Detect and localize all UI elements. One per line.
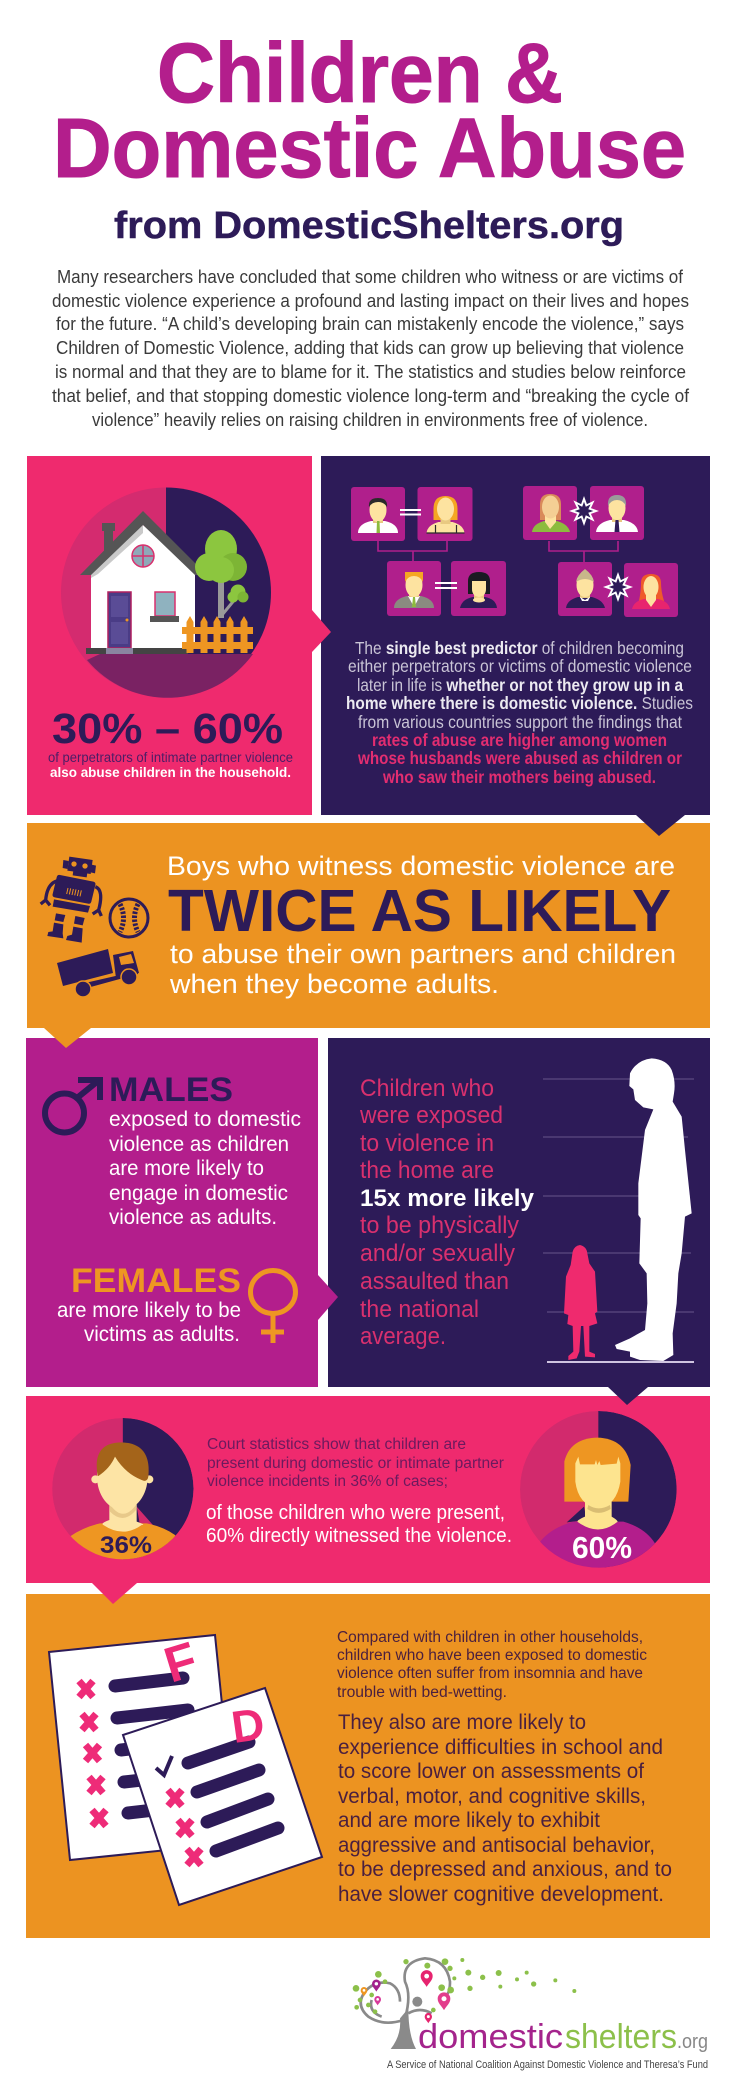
connector lines xyxy=(378,541,618,562)
title: Domestic Abuse xyxy=(53,101,686,195)
text: children exposed: 15x more likely xyxy=(360,1185,535,1212)
stat: 36%: 36% xyxy=(100,1532,152,1559)
icon: equals sign bottom xyxy=(435,583,457,588)
icon: girl 60 percent pie xyxy=(520,1411,677,1572)
icon: baseball xyxy=(110,899,148,937)
text: school difficulties: to score lower on assessments of xyxy=(338,1760,644,1783)
intro paragraph: Children of Domestic Violence, adding that kids can grow up believing that violence xyxy=(56,338,684,358)
text: children exposed: and/or sexually xyxy=(360,1240,515,1267)
icon: test paper graded F: F xyxy=(158,1631,203,1694)
icon: female symbol xyxy=(250,1270,296,1343)
icon: man with navy tie xyxy=(590,486,644,540)
stat caption: of perpetrators of intimate partner violence xyxy=(48,750,293,765)
icon: man in navy suit xyxy=(558,562,612,616)
text: insomnia and bed-wetting: children who have been exposed to domestic xyxy=(337,1647,647,1664)
icon: woman in green top xyxy=(523,486,577,540)
lead text: Boys who witness domestic violence are xyxy=(167,851,675,881)
icon: test paper graded D: D xyxy=(228,1698,268,1753)
icon: toy robot xyxy=(41,857,101,943)
text: children exposed: assaulted than xyxy=(360,1268,509,1295)
text: males: engage in domestic xyxy=(109,1182,288,1205)
text: children exposed xyxy=(359,1075,535,1350)
heading: females: FEMALES xyxy=(71,1262,241,1300)
text: children exposed: the home are xyxy=(360,1157,494,1184)
icon: test paper graded D xyxy=(123,1688,322,1905)
text: females: victims as adults. xyxy=(84,1323,240,1346)
follow-up text xyxy=(169,939,676,999)
text: insomnia and bed-wetting xyxy=(337,1629,647,1701)
text: directly witnessed: of those children who were present, xyxy=(206,1501,505,1524)
subtitle: from DomesticShelters.org xyxy=(114,205,624,247)
icon: tree with map pins xyxy=(353,1958,576,2049)
icon: woman with blonde hair xyxy=(418,487,472,541)
text: children exposed: average. xyxy=(360,1323,446,1350)
text: court statistics: Court statistics show that children are xyxy=(207,1436,466,1453)
stat: 60%: 60% xyxy=(572,1530,632,1565)
icon: house in circle xyxy=(61,488,271,698)
text: school difficulties: aggressive and antisocial behavior, xyxy=(338,1834,655,1857)
silhouette: child xyxy=(564,1245,597,1360)
text: children exposed: were exposed xyxy=(359,1102,503,1129)
arrow: pink to navy panel xyxy=(312,610,331,652)
text: males: are more likely to xyxy=(109,1157,264,1180)
follow-up text: to abuse their own partners and children xyxy=(170,939,676,969)
silhouette: adult xyxy=(615,1058,692,1361)
intro paragraph: is normal and that they are to blame for it. The statistics and studies below reinforce xyxy=(55,362,686,382)
predictor text: who saw their mothers being abused. xyxy=(382,767,656,787)
panel: 30 to 60 percent stat xyxy=(27,456,331,815)
title: Children & xyxy=(157,26,563,120)
arrow: navy to orange panel xyxy=(636,815,685,836)
icon: male symbol xyxy=(45,1080,100,1132)
text: females: are more likely to be xyxy=(57,1299,241,1322)
text: insomnia and bed-wetting: violence often suffer from insomnia and have xyxy=(337,1665,643,1682)
wordmark: domestic xyxy=(418,2018,563,2056)
predictor text: from various countries support the findings that xyxy=(358,712,682,732)
text: school difficulties: experience difficulties in school and xyxy=(338,1736,663,1759)
text: females xyxy=(57,1299,241,1346)
heading: males: MALES xyxy=(109,1071,233,1109)
predictor text: home where there is domestic violence. Studies xyxy=(346,693,693,713)
intro paragraph: domestic violence experience a profound and lasting impact on their lives and hopes xyxy=(52,291,689,311)
text: males: violence as adults. xyxy=(109,1206,277,1229)
intro paragraph: that belief, and that stopping domestic violence long-term and “breaking the cycle of xyxy=(52,386,690,406)
text: males xyxy=(109,1108,301,1229)
text: directly witnessed xyxy=(206,1501,512,1547)
title xyxy=(53,26,686,195)
text: school difficulties: and are more likely to exhibit xyxy=(338,1809,600,1832)
icon: conflict burst bottom xyxy=(603,572,633,602)
intro paragraph: for the future. “A child’s developing brain can mistakenly encode the violence,” says xyxy=(56,314,684,334)
icon: woman with red hair xyxy=(624,563,678,617)
icon: truck xyxy=(57,949,139,997)
panel: family predictor xyxy=(321,456,710,815)
wordmark xyxy=(418,2018,708,2056)
height chart lines xyxy=(543,1079,694,1312)
icon: conflict burst top xyxy=(569,496,599,526)
predictor text: either perpetrators or victims of domestic violence xyxy=(348,656,692,676)
predictor text: The single best predictor of children becoming xyxy=(355,638,684,658)
predictor text: whose husbands were abused as children or xyxy=(357,748,682,768)
text: court statistics: present during domestic or intimate partner xyxy=(207,1455,504,1472)
icon: man in grey suit xyxy=(387,561,441,616)
text: school difficulties: They also are more likely to xyxy=(338,1711,586,1734)
text: children exposed: the national xyxy=(360,1296,479,1323)
wordmark: .org xyxy=(677,2031,708,2053)
panel: twice as likely xyxy=(27,815,710,1028)
stat: 30% to 60%: 30% – 60% xyxy=(52,705,283,753)
text: court statistics xyxy=(207,1436,504,1490)
icon: boy 36 percent pie xyxy=(52,1418,193,1570)
predictor text xyxy=(346,638,693,787)
text: children exposed: to violence in xyxy=(360,1130,494,1157)
logo: domesticshelters.org xyxy=(353,1958,708,2071)
intro paragraph xyxy=(52,267,690,430)
stat caption xyxy=(48,750,293,780)
text: males: exposed to domestic xyxy=(109,1108,301,1131)
text: court statistics: violence incidents in 36% of cases; xyxy=(207,1473,448,1490)
panel: males and females xyxy=(26,1028,338,1387)
follow-up text: when they become adults. xyxy=(169,969,499,999)
panel: court statistics xyxy=(26,1387,710,1583)
intro paragraph: Many researchers have concluded that some children who witness or are victims of xyxy=(57,267,684,287)
icon: equals sign top xyxy=(400,510,421,514)
headline: twice as likely: TWICE AS LIKELY xyxy=(168,878,671,944)
arrow: navy to pink panel xyxy=(608,1387,648,1405)
arrow: purple to navy panel xyxy=(318,1275,338,1320)
text: school difficulties: have slower cognitive development. xyxy=(338,1883,664,1906)
text: children exposed: to be physically xyxy=(360,1212,519,1239)
text: school difficulties xyxy=(338,1711,672,1906)
predictor text: later in life is whether or not they grow up in a xyxy=(357,675,683,695)
stat caption: also abuse children in the household. xyxy=(50,765,291,780)
text: males: violence as children xyxy=(109,1133,289,1156)
icon: woman with black hair xyxy=(451,561,506,616)
arrow: pink to orange panel xyxy=(92,1583,137,1604)
icon: test paper graded F xyxy=(49,1631,236,1860)
icon: man with green tie xyxy=(351,487,405,541)
predictor text: rates of abuse are higher among women xyxy=(372,730,667,750)
text: insomnia and bed-wetting: Compared with children in other households, xyxy=(337,1629,643,1646)
text: school difficulties: to be depressed and anxious, and to xyxy=(338,1858,672,1881)
wordmark: shelters xyxy=(565,2018,677,2056)
text: school difficulties: verbal, motor, and cognitive skills, xyxy=(338,1785,646,1808)
panel: school and development xyxy=(26,1583,710,1938)
text: children exposed: Children who xyxy=(360,1075,494,1102)
text: directly witnessed: 60% directly witnessed the violence. xyxy=(206,1524,512,1547)
text: insomnia and bed-wetting: trouble with bed-wetting. xyxy=(337,1684,507,1701)
panel: 15x more likely xyxy=(328,1038,710,1387)
intro paragraph: violence” heavily relies on raising children in environments free of violence. xyxy=(92,410,648,430)
arrow: orange to purple panel xyxy=(44,1028,91,1048)
